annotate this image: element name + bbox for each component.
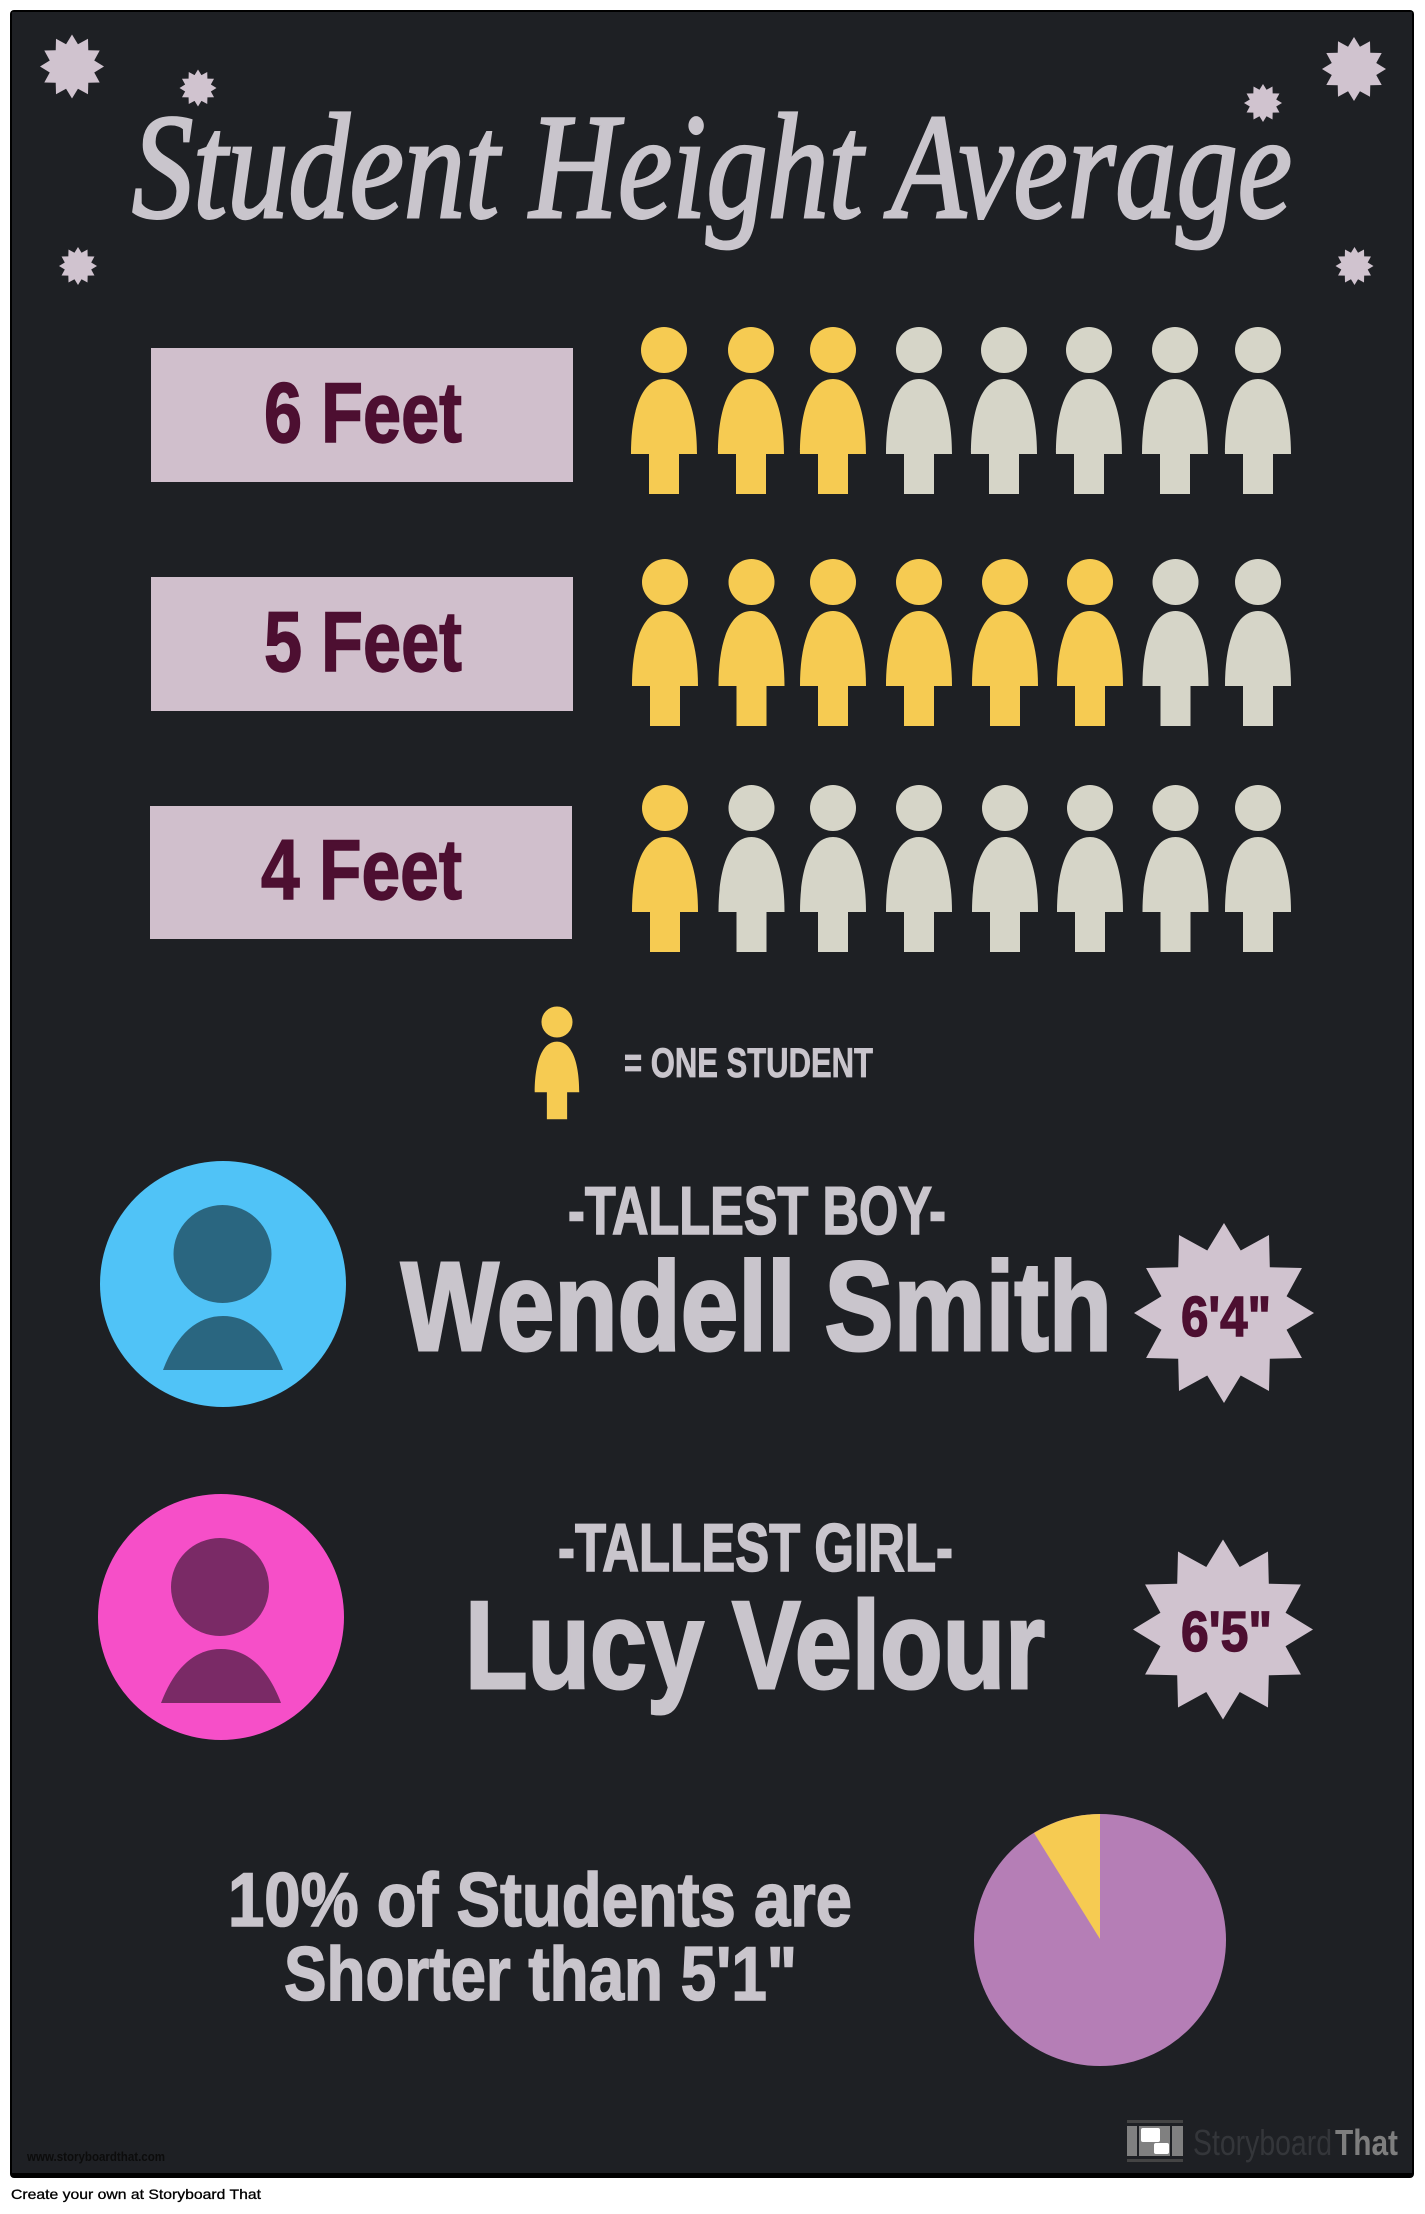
storyboard that logo xyxy=(1127,2120,1398,2163)
footer credit: Create your own at Storyboard That xyxy=(11,2186,261,2202)
watermark url: www.storyboardthat.com xyxy=(26,2149,165,2164)
label box: 6 feet xyxy=(151,348,573,482)
statistic text: Shorter than 5'1" xyxy=(284,1932,797,2017)
row: 5 feet xyxy=(151,559,1291,726)
pictogram: 6 of 8 students xyxy=(632,559,1291,726)
statistic text xyxy=(228,1858,852,2017)
legend xyxy=(535,1006,873,1119)
decorative stars xyxy=(40,34,1386,285)
label box: 5 feet: 5 Feet xyxy=(264,595,462,690)
row: 6 feet xyxy=(151,327,1291,494)
avatar: tallest boy xyxy=(100,1161,346,1407)
badge: 6'4": 6'4" xyxy=(1181,1285,1271,1349)
label box: 5 feet xyxy=(151,577,573,711)
logo icon xyxy=(1127,2120,1183,2162)
pie chart: 10 percent xyxy=(974,1814,1226,2066)
tallest boy name: Wendell Smith xyxy=(401,1236,1112,1377)
tallest boy label: -TALLEST BOY- xyxy=(568,1173,946,1249)
avatar: tallest girl xyxy=(98,1494,344,1740)
tallest girl name: Lucy Velour xyxy=(465,1577,1045,1715)
badge: 6'5": 6'5" xyxy=(1181,1600,1272,1664)
pictogram: 3 of 8 students xyxy=(631,327,1291,494)
statistic text: 10% of Students are xyxy=(228,1858,852,1943)
badge: 6'5" xyxy=(1133,1540,1313,1720)
pictogram: 1 of 8 students xyxy=(632,785,1291,952)
icon: one student xyxy=(535,1006,579,1119)
label box: 4 feet: 4 Feet xyxy=(261,823,462,918)
label box: 6 feet: 6 Feet xyxy=(264,366,462,461)
badge: 6'4" xyxy=(1134,1223,1314,1403)
row: 4 feet xyxy=(150,785,1291,952)
label box: 4 feet xyxy=(150,806,572,939)
legend text: = ONE STUDENT xyxy=(624,1039,873,1086)
logo text: Storyboard xyxy=(1193,2122,1332,2163)
storyboard that logo: That xyxy=(1335,2122,1398,2163)
tallest girl label: -TALLEST GIRL- xyxy=(558,1510,953,1586)
